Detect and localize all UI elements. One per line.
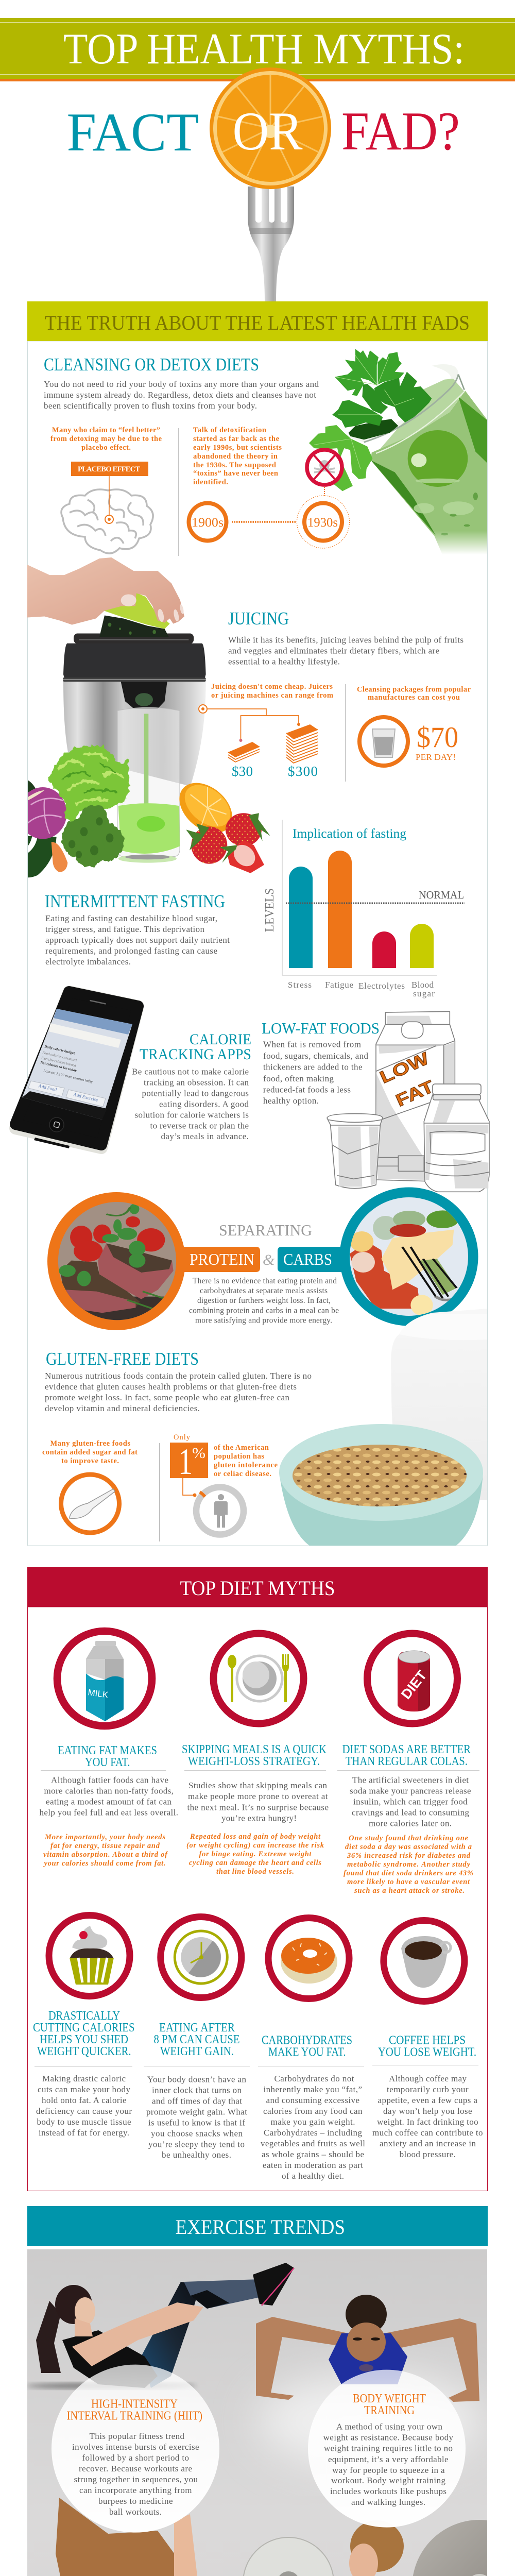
category labels: Stress [288,980,312,990]
myth 6 body: eaten in moderation as part [263,2160,363,2170]
myth 6 body: Carbohydrates do not [274,2074,354,2083]
icon: no toxins sign [307,450,342,496]
text: separating body: combining protein and carbs in a meal can be [189,1307,339,1315]
myth 5 body [146,2074,247,2160]
text: calorie tracking body: potentially lead to dangerous [142,1089,249,1098]
text: intermittent fasting body [45,913,230,967]
myth 2 callout: Repeated loss and gain of body weight [190,1833,321,1841]
text: separating body: more satisfying and provide more energy. [195,1316,332,1325]
text: intermittent fasting body: requirements, and prolonged fasting can cause [45,946,217,956]
label: placebo effect [71,462,148,523]
myth 5 body: inner clock that turns on [152,2086,242,2095]
icon: diet soda can [367,1633,457,1724]
myth 3 heading: DIET SODAS ARE BETTER [342,1743,471,1756]
text: calorie tracking body: solution for calorie watchers is [135,1110,249,1120]
icon: coffee cup [384,1921,465,2001]
icon: smartphone with calorie app: Exercise calories burned [41,1056,77,1068]
text: juicing body: While it has its benefits, juicing leaves behind the pulp of fruits [228,635,464,645]
heading: juicing: JUICING [228,608,289,629]
myth 3 body: The artificial sweeteners in diet [352,1775,469,1785]
icon: 300 dollar stack [286,724,318,763]
normal label: NORMAL [419,889,464,901]
title: top health myths: TOP HEALTH MYTHS: [63,25,465,73]
callout: detoxification history: “toxins” have never been [193,469,278,478]
text: separating body: carbohydrates at separate meals assists [200,1286,328,1295]
bubble: body weight training [308,2370,466,2528]
myth 5 body: and off times of day that [152,2096,242,2106]
myth 2 callout: for binge eating. Extreme weight [199,1850,312,1858]
myth 2 body: Studies show that skipping meals can [188,1781,328,1790]
label: placebo effect: PLACEBO EFFECT [78,465,140,473]
myth 4 body: instead of fat for energy. [39,2128,129,2138]
bar chart: implication of fasting [263,820,465,998]
icon: cupcake [49,1916,130,1996]
myth 2 callout: (or weight cycling) can increase the risk [186,1841,324,1850]
myth 1 body [39,1775,178,1818]
text: calorie tracking body: to reverse track or plan the [150,1121,249,1131]
callout: detoxification history [193,426,282,486]
stat: 70 dollars per day: PER DAY! [416,752,456,762]
callout: detoxification history: Talk of detoxification [193,426,266,434]
text: juicing body: and veggies and eliminates their dietary fibers, which are [228,646,439,655]
callout: detoxification history: started as far back as the [193,435,280,443]
chart title: Implication of fasting [293,827,406,841]
text: cleansing body: You do not need to rid your body of toxins any more than your organs and [44,379,319,389]
icon: vegetables [19,746,129,877]
text: low-fat body: When fat is removed from [263,1040,361,1049]
body weight heading: BODY WEIGHT [353,2392,426,2405]
icon: steak photo circle [47,1192,185,1330]
stat: 70 dollars per day: $70 [417,721,458,754]
icon: fork [248,185,294,301]
myth 1 callout: More importantly, your body needs [44,1833,165,1841]
myth 5 body: promote weight gain. What [146,2107,247,2117]
icon: low fat sketch [327,1011,489,1192]
panel heading: THE TRUTH ABOUT THE LATEST HEALTH FADS [45,311,470,334]
myth 3 body [350,1775,471,1828]
myth 6 body: as whole grains – should be [262,2149,364,2159]
myth 3 body: insulin, which can trigger food [353,1797,468,1807]
title: fad: FAD? [341,101,460,161]
callout: detoxification history: the 1930s. The supposed [193,461,276,469]
myth 1 callout [43,1833,168,1868]
bar: stress [289,867,313,968]
myth 4 heading: DRASTICALLY [48,2009,120,2023]
text: low-fat body: food, often making [263,1074,334,1083]
hiit body: recover. Because workouts are [79,2464,192,2473]
myth 6 body: Carbohydrates – including [264,2128,363,2138]
icon: smartphone with calorie app: Add Exercise [73,1092,98,1103]
myth 6 heading: CARBOHYDRATES [262,2034,352,2047]
callout: added sugar: to improve taste. [61,1457,119,1465]
myth 5 body: you choose snacks when [151,2129,243,2139]
myth 3 body: cravings and lead to consuming [352,1808,470,1818]
text: celiac statistic: or celiac disease. [214,1470,271,1478]
heading: calorie tracking apps [140,1031,251,1063]
hiit body: can incorporate anything from [79,2485,192,2495]
hiit body: burpees to medicine [98,2496,173,2506]
myth 5 body: you’re sleepy they tend to [148,2140,245,2149]
callout: placebo text [50,426,162,452]
hiit body: followed by a short period to [82,2453,189,2463]
body weight body: weight as resistance. Because body [323,2433,453,2443]
body weight body: and walking lunges. [351,2497,425,2507]
myth 4 body: deficiency can cause your [36,2106,132,2116]
icon: diet soda can: DIET [398,1667,430,1702]
myth 1 body: Although fattier foods can have [51,1775,168,1785]
myth 6 body: make you gain weight. [271,2117,355,2127]
bar: electrolytes [372,931,396,968]
text: celiac statistic [214,1444,278,1478]
myth 6 heading [262,2034,352,2059]
panel: the truth about the latest health fads [27,301,488,1546]
text: separating body: There is no evidence that eating protein and [193,1277,337,1285]
callout: cleansing packages [357,685,471,702]
myth 3 callout: metabolic syndrome. Another study [347,1860,471,1869]
icon: orange slice [210,67,331,189]
hiit heading: INTERVAL TRAINING (HIIT) [67,2409,202,2422]
category labels: Fatigue [325,980,353,990]
body weight body: equipment, it’s a very affordable [328,2454,449,2464]
text: cleansing body: been scientifically proven to flush toxins from your body. [44,401,257,411]
myth 4 body: hold onto fat. A calorie [42,2095,127,2105]
text: intermittent fasting body: electrolyte imbalances. [45,957,131,967]
myth 2 callout: cycling can damage the heart and cells [189,1859,321,1867]
myth 6 body: calories from any food can [263,2106,363,2116]
text: calorie tracking body: tracking an obsession. It can [144,1078,249,1087]
myth 7 body: anxiety and an increase in [380,2139,476,2148]
category labels: sugar [413,989,435,998]
text: juicing body: essential to a healthy lifestyle. [228,656,340,667]
text: gluten-free body: promote weight loss. In fact, some people who eat gluten-free can [45,1393,289,1402]
text: gluten-free body [45,1371,312,1413]
text: intermittent fasting body: trigger stress, and fatigue. This deprivation [45,924,205,934]
myth 2 callout: that line blood vessels. [216,1868,294,1876]
hiit body: ball workouts. [109,2507,162,2517]
text: separating body [189,1277,339,1325]
myth 2 body: the next meal. It’s no surprise because [187,1802,329,1812]
myth 6 body: and consuming excessive [266,2095,359,2105]
icon: glass in ring [359,717,408,766]
myth 6 body: inherently make you “fat,” [264,2084,362,2094]
title: fact: FACT [67,102,199,162]
icon: smartphone with calorie app: I can eat 1,107 more calories today [43,1069,93,1084]
timeline: 1900s to 1930s: 1900s [192,516,224,530]
myth 7 body: day won’t help you lose [383,2106,472,2116]
text: low-fat body: healthy option. [263,1096,319,1106]
myth 7 body [372,2074,483,2159]
myth 4 heading: HELPS YOU SHED [40,2033,128,2046]
icon: smartphone with calorie app: Food calories consumed [42,1050,77,1062]
heading: separating: SEPARATING [219,1221,312,1239]
hiit body: strung together in sequences, you [74,2475,198,2484]
panel heading: TOP DIET MYTHS [180,1577,335,1600]
icon: smartphone with calorie app: Daily calorie budget [44,1044,76,1056]
panel: exercise photo collage [26,2249,515,2576]
icon: plate and cutlery [213,1633,304,1724]
callout: placebo text: Many who claim to “feel better” [52,426,160,434]
text: gluten-free body: evidence that gluten causes health problems or that gluten-free diets [45,1382,297,1392]
body weight body: workout. Body weight training [331,2476,446,2485]
myth 6 body: vegetables and fruits as well [261,2139,365,2148]
text: celiac statistic: gluten intolerance [214,1461,278,1469]
photo: zumba dancer [56,2498,197,2576]
myth 4 body: cuts can make your body [38,2084,131,2094]
body weight body: way for people to squeeze in a [332,2465,445,2475]
heading: calorie tracking apps: TRACKING APPS [140,1046,251,1063]
myth 7 heading [378,2034,476,2059]
myth 2 heading: WEIGHT-LOSS STRATEGY. [188,1755,320,1768]
icon: clock [161,1917,242,1998]
icon: 30 dollar stack [228,742,260,762]
stat: 1 percent [170,1433,208,1482]
bar: blood sugar [410,924,434,968]
myth 1 heading: YOU FAT. [85,1756,130,1769]
timeline: 1900s to 1930s [188,496,349,548]
bar: fatigue [328,851,352,968]
myth 4 body [36,2074,132,2138]
callout: juicer cost: Juicing doesn't come cheap. Juicers [211,683,333,691]
icon: donut [268,1918,349,1999]
text: low-fat body [263,1040,369,1106]
myth 2 heading [182,1743,327,1768]
callout: added sugar: contain added sugar and fat [42,1448,138,1456]
text: celiac statistic: of the American [214,1444,269,1452]
text: juicing body [228,635,464,667]
text: low-fat body: reduced-fat foods a less [263,1085,351,1094]
myth 4 heading: WEIGHT QUICKER. [37,2045,131,2058]
timeline: 1900s to 1930s: 1930s [307,516,338,530]
myth 5 body: be unhealthy ones. [162,2150,231,2160]
myth 7 body: blood pressure. [400,2149,456,2159]
panel heading: exercise trends [27,2206,488,2246]
photo: woman doing pushup [256,2295,479,2402]
icon: smartphone with calorie app: Add Food [38,1083,58,1092]
panel: top diet myths [27,1567,488,2191]
icon: person in ring [183,1478,244,1534]
heading: low-fat foods: LOW-FAT FOODS [262,1019,380,1037]
myth 1 callout: vitamin absorption. About a third of [43,1851,168,1859]
icon: smoothie glass [349,364,489,561]
myth 2 callout [186,1833,324,1876]
body weight heading [353,2392,426,2417]
icon: sugar spoon [61,1475,119,1533]
heading: cleansing or detox diets: CLEANSING OR DETOX DIETS [44,354,259,375]
low fat label: LOW [377,1049,432,1088]
category labels [288,980,435,998]
myth 4 heading [33,2009,135,2058]
connector: juicer to prices [199,705,300,742]
text: separating body: digestion or furthers weight loss. In fact, [197,1296,331,1305]
heading: calorie tracking apps: CALORIE [190,1031,251,1048]
myth 3 callout: diet soda a day was associated with a [345,1843,472,1851]
myth 1 body: eating a modest amount of fat can [46,1797,172,1807]
myth 5 body: is useful to know is that if [148,2118,245,2128]
myth 3 callout: 36% increased risk for diabetes and [347,1852,471,1860]
myth 5 heading: EATING AFTER [159,2021,235,2035]
myth 7 body: much coffee can contribute to [372,2128,483,2138]
text: calorie tracking body: eating disorders. A good [159,1099,249,1109]
category labels: Blood [411,980,434,990]
category labels: Electrolytes [358,981,405,991]
text: low-fat body: thickeners are added to the [263,1062,363,1072]
myth 2 body: you’re extra hungry! [221,1814,297,1823]
callout: added sugar [42,1439,138,1465]
icon: orange and strawberries [173,773,270,873]
text: cleansing body [44,379,319,411]
heading: intermittent fasting: INTERMITTENT FASTING [45,891,225,911]
text: calorie tracking body: Be cautious not to make calorie [132,1066,249,1077]
myth 7 body: appetite, even a few cups a [378,2095,477,2105]
text: celiac statistic: population has [214,1452,264,1461]
stat: 1 percent: Only [174,1433,191,1442]
price: 300 dollars: $300 [288,764,318,779]
text: low-fat body: food, sugars, chemicals, and [263,1051,369,1061]
myth 4 body: body to use muscle tissue [37,2117,131,2127]
myth 3 callout: such as a heart attack or stroke. [354,1887,465,1895]
myth 7 heading: COFFEE HELPS [389,2034,466,2047]
ampersand: & [263,1251,275,1268]
icon: cereal bowl [279,1424,483,1551]
myth 2 heading: SKIPPING MEALS IS A QUICK [182,1743,327,1756]
panel heading: exercise trends: EXERCISE TRENDS [176,2215,345,2239]
callout: placebo text: from detoxing may be due to the [50,435,162,443]
callout: added sugar: Many gluten-free foods [50,1439,130,1448]
hiit body: This popular fitness trend [90,2431,184,2441]
label: carbs: CARBS [283,1250,332,1268]
label: protein: PROTEIN [190,1250,254,1268]
stat: 1 percent: 1 [178,1441,193,1482]
myth 7 body: temporarily curb your [387,2084,469,2094]
callout: juicer cost: or juicing machines can range from [211,691,333,700]
price: 30 dollars: $30 [232,764,253,779]
icon: milk carton [57,1631,152,1726]
callout: detoxification history: early 1990s, but scientists [193,444,282,452]
stat: 1 percent: % [192,1445,205,1462]
myth 3 callout [344,1834,473,1895]
text: cleansing body: immune system already do. Regardless, detox diets and cleanses have not [44,390,316,400]
myth 1 heading: EATING FAT MAKES [58,1744,157,1757]
hiit body [72,2431,199,2517]
title band [0,18,515,81]
myth 5 heading: WEIGHT GAIN. [160,2045,234,2058]
hiit heading: HIGH-INTENSITY [91,2398,178,2411]
myth 1 body: more calories than non-fatty foods, [44,1786,174,1796]
myth 2 body: make people more prone to overeat at [188,1791,328,1801]
callout: juicer cost [211,683,333,700]
body weight body: includes workouts like pushups [330,2486,447,2496]
body weight heading: TRAINING [364,2404,415,2417]
label: protein [175,1247,260,1272]
icon: milk jug photo [391,1309,488,1500]
text: calorie tracking body [132,1066,249,1141]
text: calorie tracking body: day’s meals in advance. [161,1131,249,1141]
callout: detoxification history: abandoned the theory in [193,452,278,461]
callout: cleansing packages: manufactures can cost you [368,693,460,702]
myth 1 heading [58,1744,157,1769]
icon: juicer with hand [27,557,206,863]
myth 3 callout: more likely to have a vascular event [347,1878,470,1886]
label: carbs [278,1247,350,1272]
low fat label: FAT [393,1077,437,1111]
body weight body: weight training requires little to no [324,2444,453,2453]
low fat label [377,1049,437,1111]
myth 6 heading: MAKE YOU FAT. [268,2045,346,2059]
text: gluten-free body: develop vitamin and mineral deficiencies. [45,1403,200,1413]
callout: cleansing packages: Cleansing packages from popular [357,685,471,693]
body weight body [323,2422,453,2507]
photo: crossfit barbell lifter [243,2520,487,2576]
body weight body: A method of using your own [336,2422,443,2432]
title: or: OR [233,101,303,161]
callout: placebo text: placebo effect. [81,444,131,452]
myth 3 callout: One study found that drinking one [349,1834,469,1842]
icon: smartphone with calorie app [15,992,138,1148]
myth 5 heading: 8 PM CAN CAUSE [153,2033,240,2046]
icon: parsley leaves [309,349,432,491]
myth 4 body: Making drastic caloric [42,2074,126,2083]
icon: smartphone with calorie app: Net calories so far today [40,1060,77,1073]
myth 6 body: of a healthy diet. [282,2171,344,2181]
myth 6 body [261,2074,365,2181]
bubble: high-intensity interval training [52,2365,219,2533]
hiit body: involves intense bursts of exercise [72,2442,199,2452]
hiit heading [67,2398,202,2422]
icon: milk carton: MILK [87,1687,109,1700]
myth 3 callout: found that diet soda drinkers are 43% [344,1869,473,1877]
myth 1 body: help you feel full and eat less overall. [39,1808,178,1818]
myth 4 heading: CUTTING CALORIES [33,2021,135,2035]
myth 5 body: Your body doesn’t have an [147,2074,246,2084]
text: intermittent fasting body: approach typically does not support daily nutrient [45,935,230,945]
myth 7 body: weight. In fact drinking too [377,2117,478,2127]
myth 3 body: soda make your pancreas release [350,1786,471,1796]
myth 1 callout: your calories should come from fat. [43,1859,166,1868]
icon: pasta photo circle [340,1187,478,1326]
myth 3 heading [342,1743,471,1768]
text: gluten-free body: Numerous nutritious foods contain the protein called gluten. There is no [45,1371,312,1381]
myth 7 body: Although coffee may [389,2074,467,2083]
myth 1 callout: fat for energy, tissue repair and [50,1842,160,1850]
myth 7 heading: YOU LOSE WEIGHT. [378,2045,476,2059]
callout: detoxification history: identified. [193,478,228,486]
photo: woman doing v-sit crunch [26,2263,294,2389]
text: intermittent fasting body: Eating and fasting can destabilize blood sugar, [45,913,217,923]
icon: brain [61,489,153,553]
myth 3 heading: THAN REGULAR COLAS. [346,1755,468,1768]
heading: gluten-free diets: GLUTEN-FREE DIETS [46,1349,199,1369]
myth 3 body: more calories later on. [369,1819,452,1828]
axis label: levels: LEVELS [263,888,277,932]
myth 5 heading [153,2021,240,2058]
myth 2 body [187,1781,329,1823]
